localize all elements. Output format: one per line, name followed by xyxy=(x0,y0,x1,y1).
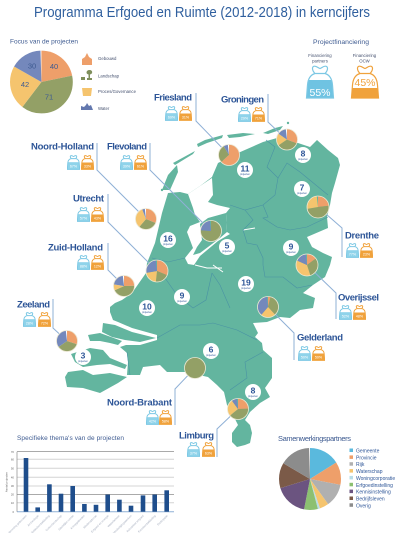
icon: bag partners 55%: 55% xyxy=(309,87,331,99)
panel: Gelderland: projecten xyxy=(241,287,252,290)
legend: samenwerkingspartners: Waterschap xyxy=(356,469,383,475)
panel: Utrecht: 43% xyxy=(94,216,102,220)
Flevoland xyxy=(193,213,227,255)
caption: financiering OCW: OCW xyxy=(359,58,371,64)
panel: Zeeland: 3 xyxy=(81,350,86,360)
icon: bag OCW 45%: 45% xyxy=(354,77,376,89)
panel: Friesland: 69% xyxy=(168,116,176,120)
leader lines xyxy=(53,93,342,457)
heading: focus van de projecten: Focus van de projecten xyxy=(10,38,78,46)
panel: Limburg xyxy=(179,384,261,457)
category labels: Participatie xyxy=(156,514,169,526)
panel: Groningen: projecten xyxy=(298,158,309,161)
panel: Flevoland: 5 xyxy=(225,240,230,250)
panel: samenwerkingspartners xyxy=(278,434,395,509)
panel: Noord-Holland: projecten xyxy=(163,243,174,246)
panel: Flevoland: projecten xyxy=(222,250,233,253)
heading: projectfinanciering: Projectfinanciering xyxy=(313,39,369,46)
y axis labels: 50 xyxy=(11,466,14,470)
panel: Limburg: 37% xyxy=(190,452,198,456)
y axis labels: 60 xyxy=(11,458,14,462)
pie chart: focus: 40 xyxy=(50,62,58,71)
panel: Zeeland xyxy=(17,300,91,365)
legend: samenwerkingspartners: Bedrijfsleven xyxy=(356,496,385,502)
panel: Drenthe: Drenthe xyxy=(345,230,379,242)
y axis labels: Aantal projecten xyxy=(4,471,8,492)
category labels: Stedelijke ruimte xyxy=(57,514,75,531)
y axis labels: 30 xyxy=(11,484,14,488)
panel: Utrecht: 57% xyxy=(80,216,88,220)
pie chart: focus: 71 xyxy=(45,92,53,102)
legend: samenwerkingspartners: Rijk xyxy=(356,462,365,468)
y axis labels xyxy=(4,450,14,514)
category labels: Kennisontwikkeling xyxy=(137,514,157,533)
panel: Gelderland xyxy=(238,276,343,361)
panel: Zeeland: projecten xyxy=(78,360,89,363)
y axis labels: 0 xyxy=(12,510,14,514)
panel: Zuid-Holland: Zuid-Holland xyxy=(48,242,103,254)
panel: Flevoland: 39% xyxy=(123,164,131,168)
panel: Noord-Brabant: 58% xyxy=(162,420,170,424)
panel: Gelderland: 19 xyxy=(241,278,251,288)
panel: Zeeland: Zeeland xyxy=(17,300,50,310)
panel: Limburg: projecten xyxy=(248,395,259,398)
panel: Utrecht xyxy=(73,194,190,305)
category labels: Industrieel erfgoed xyxy=(125,514,145,533)
panel: Gelderland: 50% xyxy=(315,356,323,360)
rivers xyxy=(195,228,255,272)
caption: financiering partners: partners xyxy=(312,58,328,64)
y axis labels: 40 xyxy=(11,476,14,480)
icon: landschap xyxy=(81,70,92,80)
legend: focus xyxy=(81,53,137,111)
panel: Noord-Holland: 33% xyxy=(84,164,92,168)
panel: Noord-Brabant: 6 xyxy=(209,344,214,354)
panel: Friesland: projecten xyxy=(240,173,251,176)
caption: financiering OCW: Financiering xyxy=(353,53,376,58)
panel: Noord-Brabant: projecten xyxy=(206,354,217,357)
panel: Zuid-Holland xyxy=(48,242,155,316)
icon: proces/governance xyxy=(82,88,92,96)
panel: Zeeland: 72% xyxy=(41,322,49,326)
panel: Friesland: Friesland xyxy=(154,92,192,104)
panel: Overijssel: 52% xyxy=(342,314,350,318)
panel: Zuid-Holland: 12% xyxy=(94,264,102,268)
panel: Friesland: 11 xyxy=(240,164,250,174)
panel: Friesland: 31% xyxy=(182,116,190,120)
panel: Zuid-Holland: 10 xyxy=(142,302,152,312)
category labels: Krimpgebieden xyxy=(70,514,86,530)
panel: Gelderland: 50% xyxy=(301,356,309,360)
legend: samenwerkingspartners: Overig xyxy=(356,503,371,509)
pie chart: samenwerkingspartners xyxy=(294,464,326,494)
panel: Drenthe: 23% xyxy=(363,252,371,256)
y axis labels: 10 xyxy=(11,501,14,505)
legend: focus: Gebouwd xyxy=(98,56,117,61)
legend: samenwerkingspartners: Woningcorporatie xyxy=(356,476,395,482)
panel: Flevoland: 61% xyxy=(137,164,145,168)
panel: Groningen xyxy=(221,94,311,163)
map of the Netherlands xyxy=(65,122,340,447)
panel: Utrecht: Utrecht xyxy=(73,194,105,204)
panel: Friesland xyxy=(154,92,253,178)
panel: Gelderland: Gelderland xyxy=(297,332,343,344)
panel: Zuid-Holland: 88% xyxy=(80,264,88,268)
Wadden islands xyxy=(161,122,289,191)
panel: Utrecht: 9 xyxy=(180,290,185,300)
panel: Noord-Holland xyxy=(31,142,176,248)
icon: gebouwd xyxy=(82,53,92,65)
panel: Zeeland: 28% xyxy=(26,322,34,326)
category labels: Cultuurlandschap xyxy=(44,514,63,532)
legend: samenwerkingspartners: Gemeente xyxy=(356,448,380,454)
y axis labels: 20 xyxy=(11,492,14,496)
panel: Drenthe: 77% xyxy=(349,252,357,256)
legend: samenwerkingspartners xyxy=(350,448,395,509)
panel: Flevoland: Flevoland xyxy=(107,142,147,152)
panel: Overijssel: 48% xyxy=(356,314,364,318)
panel: Flevoland xyxy=(107,142,235,255)
panel: Overijssel xyxy=(283,240,379,320)
pie chart: focus: 42 xyxy=(21,80,29,89)
province borders xyxy=(127,140,328,390)
panel: Utrecht: projecten xyxy=(177,300,188,303)
panel: Noord-Brabant xyxy=(107,343,219,425)
panel: Drenthe: 7 xyxy=(300,182,305,192)
pie chart: focus xyxy=(21,62,58,102)
panel: Zuid-Holland: projecten xyxy=(142,311,153,314)
panel: Noord-Brabant: 42% xyxy=(149,420,157,424)
legend: focus: Landschap xyxy=(98,74,120,78)
legend: focus: Proces/Governance xyxy=(98,89,137,94)
panel: Groningen: Groningen xyxy=(221,94,264,106)
panel: Limburg: 8 xyxy=(251,386,256,396)
y axis labels: 70 xyxy=(11,450,14,454)
IJsselmeer and Markermeer xyxy=(185,178,230,265)
panel: Noord-Holland: 16 xyxy=(163,234,173,244)
icon: water xyxy=(81,103,93,110)
heading: specifieke thema's: Specifieke thema's van de projecten xyxy=(17,435,124,442)
heading: samenwerkingspartners: Samenwerkingspartners xyxy=(278,434,351,443)
mainland xyxy=(110,138,340,447)
bar chart xyxy=(1,450,174,533)
pie chart: focus: 30 xyxy=(28,62,36,70)
category labels: Erfgoed en energie xyxy=(90,514,110,533)
legend: samenwerkingspartners: Provincie xyxy=(356,455,377,461)
panel: Overijssel: 9 xyxy=(289,242,294,252)
panel: Groningen: 29% xyxy=(241,116,249,120)
panel: Drenthe: projecten xyxy=(297,192,308,195)
panel: focus van de projecten xyxy=(10,38,137,111)
panel: specifieke thema's xyxy=(1,435,174,533)
category labels: Waterbeheer xyxy=(107,514,121,528)
panel: Groningen: 71% xyxy=(255,116,263,120)
panel: Drenthe xyxy=(294,181,379,258)
panel: Overijssel: Overijssel xyxy=(338,292,379,304)
legend: focus: Water xyxy=(98,106,110,111)
legend: samenwerkingspartners: Erfgoedinstelling xyxy=(356,483,393,489)
panel: Noord-Holland: 67% xyxy=(70,164,78,168)
panel: Noord-Holland: Noord-Holland xyxy=(31,142,94,152)
panel: Limburg: Limburg xyxy=(179,430,214,442)
panel: Noord-Brabant: Noord-Brabant xyxy=(107,398,173,408)
category labels: Archeologie xyxy=(26,514,40,527)
panel: Overijssel: projecten xyxy=(286,251,297,254)
panel: projectfinanciering xyxy=(306,39,378,99)
caption: financiering partners: Financiering xyxy=(308,53,332,58)
Zeeland islands xyxy=(65,323,156,393)
panel: Groningen: 8 xyxy=(301,148,306,158)
category labels xyxy=(1,513,169,533)
panel: Limburg: 63% xyxy=(205,452,213,456)
category labels: Wederopbouw xyxy=(82,513,98,529)
legend: samenwerkingspartners: Kennisinstelling xyxy=(356,490,391,496)
